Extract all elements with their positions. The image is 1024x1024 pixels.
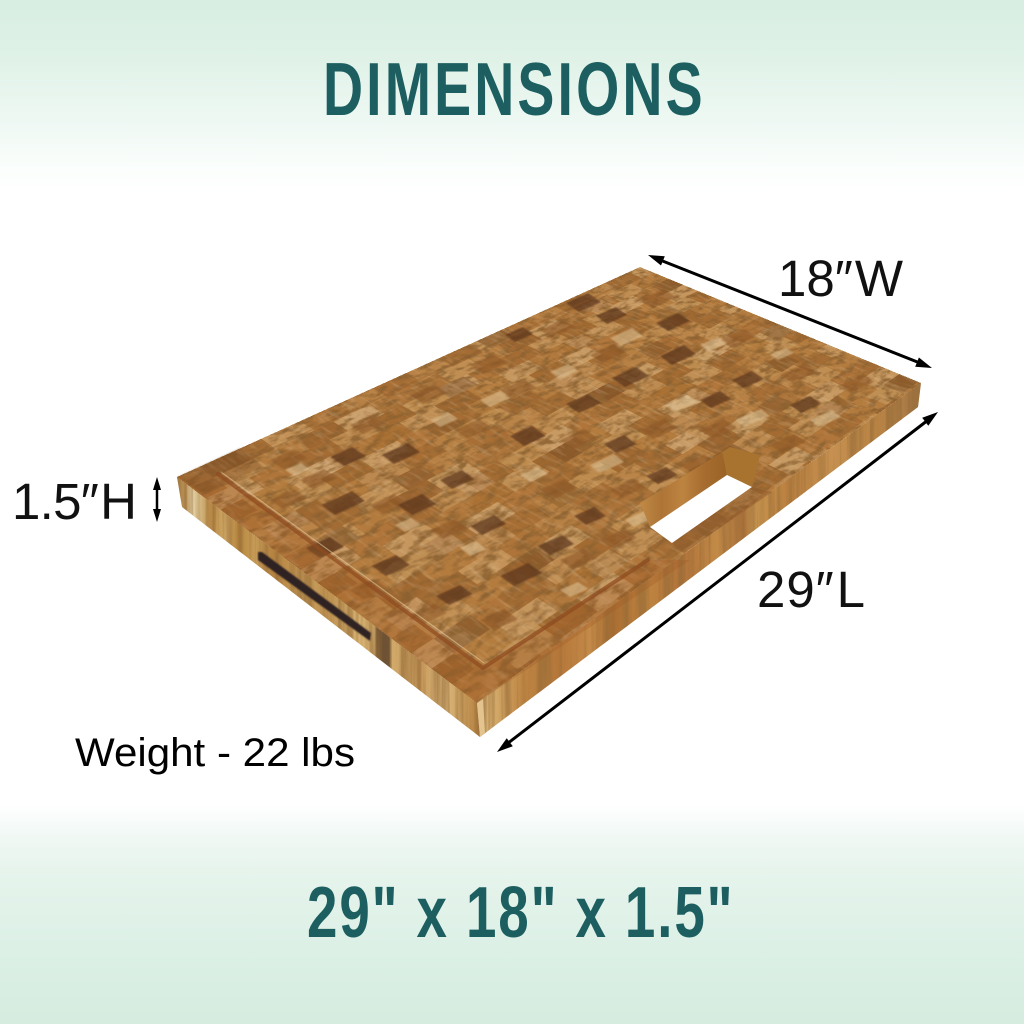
board top surface [178, 267, 920, 703]
handle slot [258, 552, 371, 641]
left rim shading [177, 448, 262, 495]
handle notch wall [640, 452, 727, 527]
height label: 1.5″H [12, 473, 137, 530]
juice groove [218, 285, 648, 668]
handle notch side wall [722, 447, 760, 487]
handle cut-out [650, 475, 752, 543]
mid-brown end-grain tiles [270, 289, 874, 630]
right front face [477, 383, 921, 737]
height arrow [153, 477, 161, 522]
light end-grain tiles [285, 328, 841, 597]
length arrow [497, 412, 938, 752]
title: DIMENSIONS [323, 47, 703, 131]
cutting board [177, 267, 921, 737]
width label: 18″W [778, 250, 903, 307]
overall size heading: 29" x 18" x 1.5" [307, 872, 733, 953]
face grain [170, 380, 930, 740]
rim tone on front edge [177, 474, 690, 703]
left front face [177, 477, 480, 737]
front corner shading [477, 699, 485, 737]
weight label: Weight - 22 lbs [75, 731, 355, 775]
handle strip surface [672, 487, 772, 553]
width arrow [648, 255, 932, 368]
length label: 29″L [757, 561, 865, 618]
dark end-grain tiles [306, 293, 821, 605]
board details [177, 285, 921, 737]
